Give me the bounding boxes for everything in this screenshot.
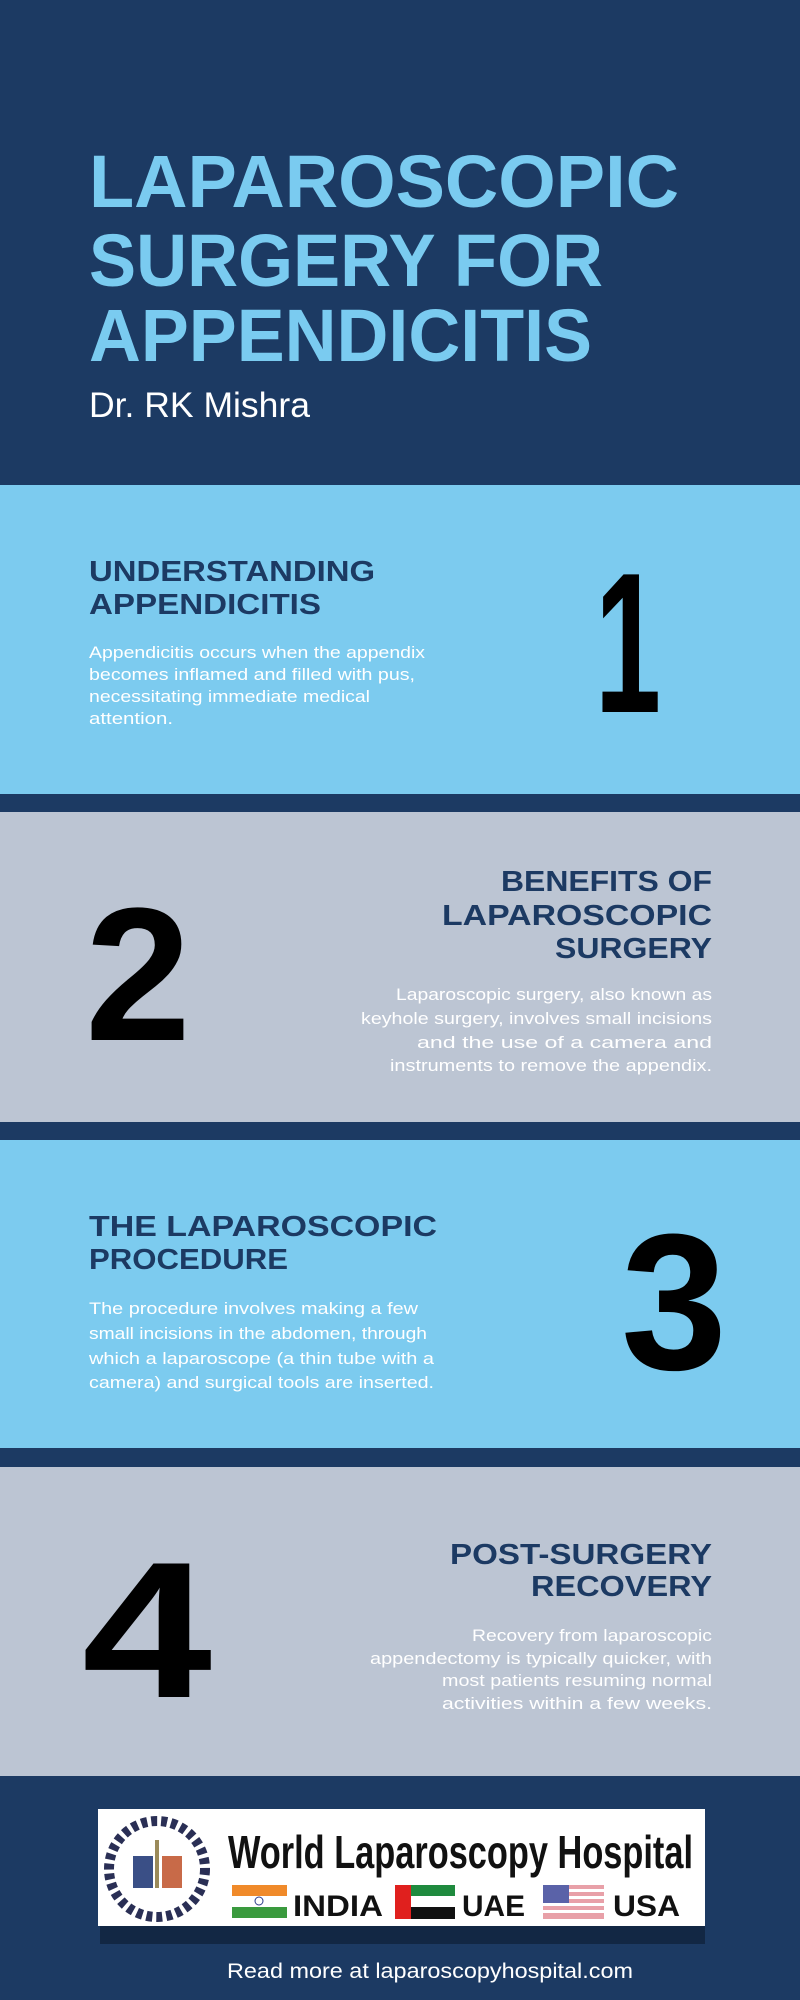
body text 4: Recovery from laparoscopic	[472, 1626, 713, 1645]
body text 4: appendectomy is typically quicker, with	[370, 1649, 712, 1668]
body text 1	[89, 643, 426, 728]
panel 3: procedure	[0, 1140, 800, 1448]
body text 3: The procedure involves making a few	[89, 1299, 419, 1318]
logo banner	[98, 1809, 705, 1944]
number 3: 3	[621, 1194, 727, 1411]
body text 4: activities within a few weeks.	[442, 1694, 712, 1713]
heading 1	[89, 556, 375, 621]
logo banner: USA	[613, 1890, 680, 1923]
body text 2: instruments to remove the appendix.	[390, 1056, 712, 1075]
heading 2: SURGERY	[555, 933, 712, 965]
body text 1: becomes inflamed and filled with pus,	[89, 665, 415, 684]
subtitle: author: Dr. RK Mishra	[89, 386, 311, 425]
heading 3	[89, 1211, 437, 1276]
panel 2: benefits	[0, 812, 800, 1122]
icon: USA flag	[543, 1885, 604, 1919]
heading 3: THE LAPAROSCOPIC	[89, 1211, 437, 1243]
footer: read more: Read more at laparoscopyhospital.com	[227, 1960, 633, 1983]
title: APPENDICITIS	[89, 294, 592, 377]
title	[89, 140, 679, 377]
body text 3: which a laparoscope (a thin tube with a	[88, 1349, 435, 1368]
panel 1: understanding appendicitis	[0, 485, 800, 794]
body text 4: most patients resuming normal	[442, 1671, 712, 1690]
icon: UAE flag	[395, 1885, 455, 1919]
number 4: 4	[82, 1522, 212, 1739]
title: LAPAROSCOPIC	[89, 140, 679, 223]
icon: wreath emblem	[109, 1821, 205, 1917]
heading 3: PROCEDURE	[89, 1244, 288, 1276]
heading 1: UNDERSTANDING	[89, 556, 375, 588]
number 2: 2	[85, 869, 191, 1081]
body text 1: Appendicitis occurs when the appendix	[89, 643, 426, 662]
heading 1: APPENDICITIS	[89, 589, 321, 621]
body text 3: small incisions in the abdomen, through	[89, 1324, 427, 1343]
number 1: 1	[595, 532, 661, 755]
body text 2: Laparoscopic surgery, also known as	[396, 985, 712, 1004]
body text 2: and the use of a camera and	[417, 1033, 712, 1052]
body text 4	[370, 1626, 713, 1713]
heading 4: POST-SURGERY	[450, 1539, 712, 1571]
panel 4: recovery	[0, 1467, 800, 1776]
heading 2: BENEFITS OF	[501, 866, 712, 898]
body text 2: keyhole surgery, involves small incisions	[361, 1009, 712, 1028]
logo banner: INDIA	[293, 1890, 383, 1923]
body text 1: necessitating immediate medical	[89, 687, 370, 706]
body text 2	[361, 985, 712, 1075]
logo banner: UAE	[462, 1890, 525, 1923]
heading 4: RECOVERY	[531, 1571, 712, 1603]
heading 4	[450, 1539, 712, 1603]
title: SURGERY FOR	[89, 219, 603, 302]
body text 3: camera) and surgical tools are inserted.	[89, 1373, 434, 1392]
heading 2	[442, 866, 712, 965]
body text 3	[88, 1299, 435, 1392]
icon: India flag	[232, 1885, 287, 1918]
heading 2: LAPAROSCOPIC	[442, 900, 712, 932]
body text 1: attention.	[89, 709, 173, 728]
